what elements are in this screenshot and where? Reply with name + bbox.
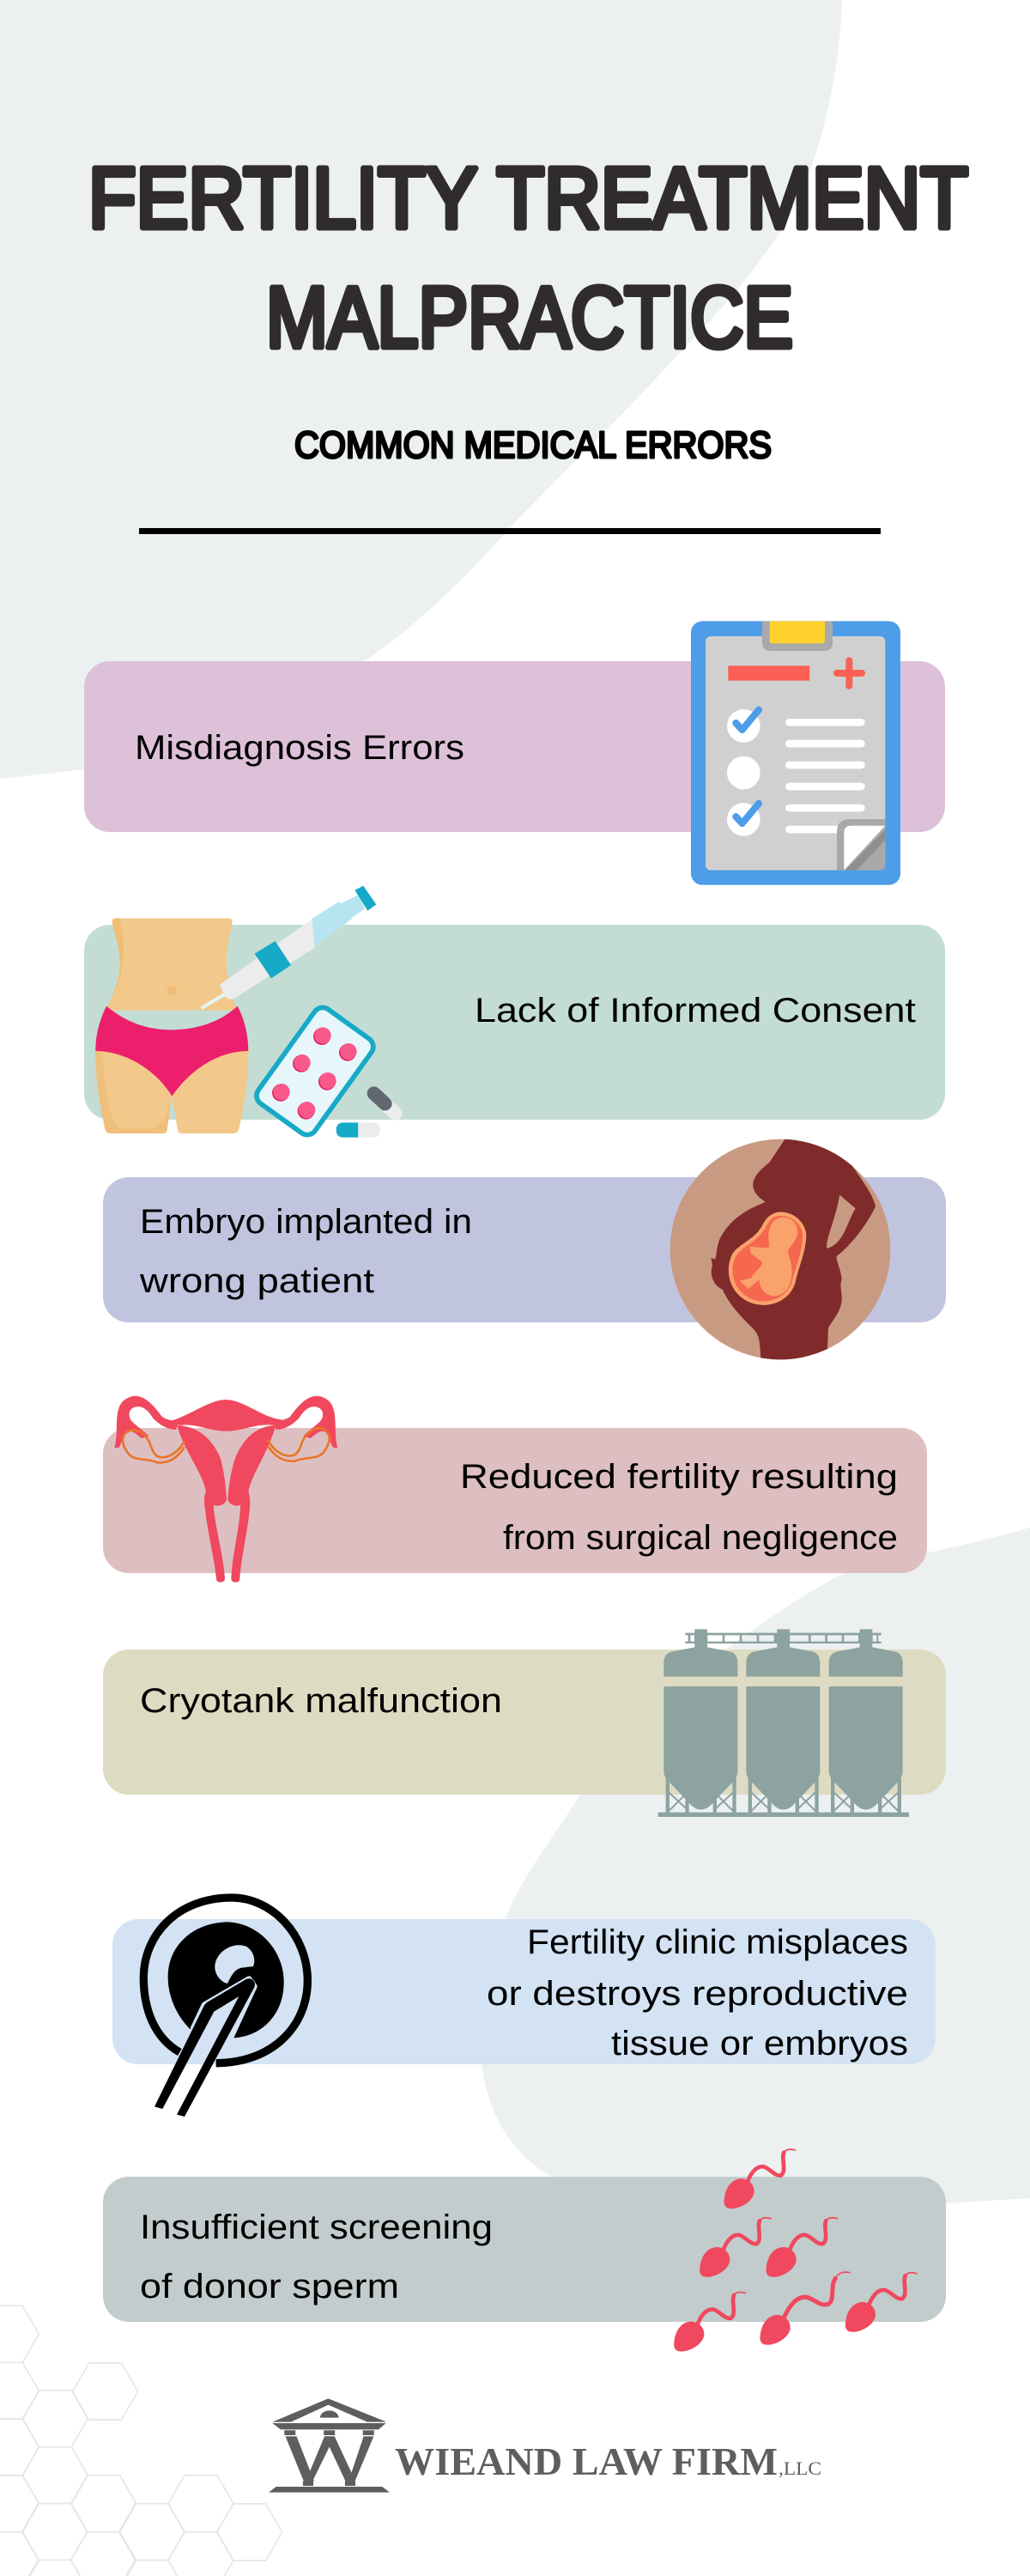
icon: embryo with pipette xyxy=(143,1898,307,2117)
logo: Wieand Law Firm xyxy=(269,2398,821,2493)
panel text xyxy=(139,1203,472,1300)
icon: uterus xyxy=(114,1396,337,1583)
panel text: Lack of Informed Consent xyxy=(475,992,916,1030)
panel text xyxy=(487,1923,908,2063)
panel: insufficient screening xyxy=(103,2177,946,2322)
panel: cryotank malfunction xyxy=(103,1649,946,1795)
panel: reduced fertility xyxy=(103,1428,927,1573)
background blob: top left xyxy=(0,0,842,779)
icon: clipboard xyxy=(691,621,900,885)
icon: cryotanks xyxy=(658,1629,909,1817)
panel text: tissue or embryos xyxy=(611,2025,908,2063)
logo suffix: ,LLC xyxy=(779,2458,821,2479)
panel: misdiagnosis errors xyxy=(84,661,945,832)
icon: torso with syringe and pills xyxy=(95,886,396,1139)
logo emblem: courthouse W xyxy=(269,2398,390,2493)
panel text: Insufficient screening xyxy=(140,2208,493,2246)
panel text: or destroys reproductive xyxy=(487,1975,908,2013)
panel text: from surgical negligence xyxy=(503,1519,898,1557)
background hexagon pattern xyxy=(0,2306,282,2576)
panel: lack of informed consent xyxy=(84,925,945,1120)
divider rule xyxy=(139,528,881,534)
panel text: Reduced fertility resulting xyxy=(460,1458,898,1496)
title xyxy=(88,150,968,366)
icon: pregnant silhouette xyxy=(670,1133,890,1363)
panel text: Cryotank malfunction xyxy=(140,1682,502,1720)
subtitle: COMMON MEDICAL ERRORS xyxy=(294,424,772,466)
panel text xyxy=(460,1458,898,1557)
panel: embryo implanted in wrong patient xyxy=(103,1177,946,1322)
panel text: wrong patient xyxy=(139,1262,374,1300)
panel text xyxy=(140,2208,493,2306)
title: MALPRACTICE xyxy=(266,270,793,366)
panel text: Fertility clinic misplaces xyxy=(527,1923,908,1961)
panel text: Embryo implanted in xyxy=(140,1203,472,1241)
icon: sperm cells xyxy=(674,2149,917,2351)
background blob: bottom right xyxy=(480,1528,1030,2213)
panel text: Misdiagnosis Errors xyxy=(135,729,464,767)
panel text: of donor sperm xyxy=(140,2268,399,2306)
title: FERTILITY TREATMENT xyxy=(88,150,968,246)
logo wordmark: WIEAND LAW FIRM xyxy=(395,2439,778,2483)
panel: clinic misplaces tissue xyxy=(112,1919,936,2064)
